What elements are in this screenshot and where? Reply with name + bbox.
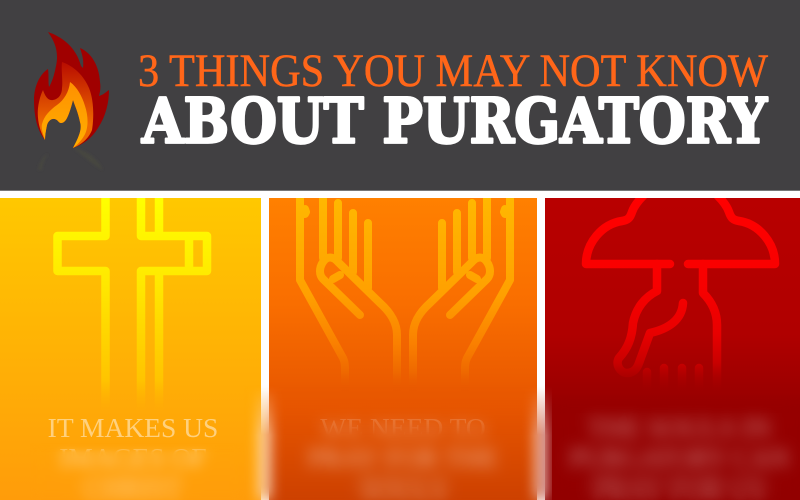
text: panel heading: WE NEED TO (320, 412, 486, 443)
icon: raised hands (296, 198, 514, 374)
header band (0, 0, 800, 191)
text: panel heading (48, 412, 218, 500)
panel: we need to pray (269, 198, 537, 500)
text: panel heading (302, 412, 501, 500)
text: panel heading: IMAGES OF (59, 442, 207, 473)
text: panel heading: THE SOULS IN (587, 412, 771, 443)
icon: hand under cloud (582, 198, 780, 378)
text: panel heading: IT MAKES US (48, 412, 218, 443)
text: panel heading: PRAY FOR THE (308, 442, 498, 473)
icon: cross (53, 198, 212, 395)
text: panel heading: PURGATORY CAN (569, 442, 789, 473)
panel: it makes us (0, 198, 261, 500)
icon: flame logo (34, 32, 109, 148)
panel: souls in purgatory (545, 198, 800, 500)
text: panel heading (564, 412, 794, 500)
